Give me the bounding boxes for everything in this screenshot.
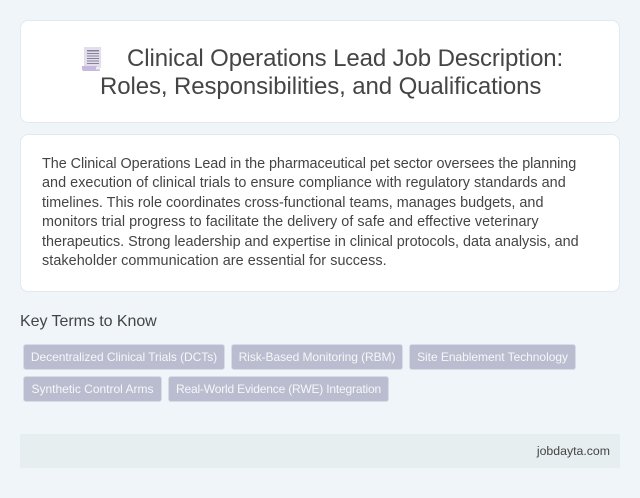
tag: site enablement technology (409, 344, 576, 370)
tag: site enablement technology: Site Enablement Technology (417, 350, 568, 364)
tag: synthetic control arms (23, 376, 162, 402)
title line 1: Clinical Operations Lead Job Description: (127, 45, 563, 72)
description panel (20, 134, 620, 292)
heading: key terms: Key Terms to Know (20, 313, 157, 330)
tag: risk-based monitoring (231, 344, 403, 370)
description line 6: stakeholder communication are essential for success. (42, 253, 387, 269)
description line 5: therapeutics. Strong leadership and expertise in clinical protocols, data analysis, and (42, 234, 579, 250)
description line 1: The Clinical Operations Lead in the pharmaceutical pet sector oversees the planning (42, 156, 576, 172)
tag: risk-based monitoring: Risk-Based Monitoring (RBM) (239, 350, 395, 364)
tag: real-world evidence: Real-World Evidence (RWE) Integration (176, 382, 381, 396)
description line 2: and execution of clinical trials to ensure compliance with regulatory standards and (42, 175, 566, 191)
footer source text: jobdayta.com (537, 444, 610, 458)
tag: decentralized clinical trials: Decentralized Clinical Trials (DCTs) (31, 350, 217, 364)
header panel (20, 20, 620, 123)
description line 3: timelines. This role coordinates cross-functional teams, manages budgets, and (42, 195, 543, 211)
tag: decentralized clinical trials (23, 344, 225, 370)
tag: synthetic control arms: Synthetic Control Arms (31, 382, 154, 396)
icon: document scroll (82, 47, 101, 71)
description line 4: monitors trial progress to facilitate the delivery of safe and effective veterinary (42, 214, 539, 230)
footer bar (20, 434, 620, 468)
tag: real-world evidence (168, 376, 389, 402)
title line 2: Roles, Responsibilities, and Qualifications (100, 73, 541, 100)
